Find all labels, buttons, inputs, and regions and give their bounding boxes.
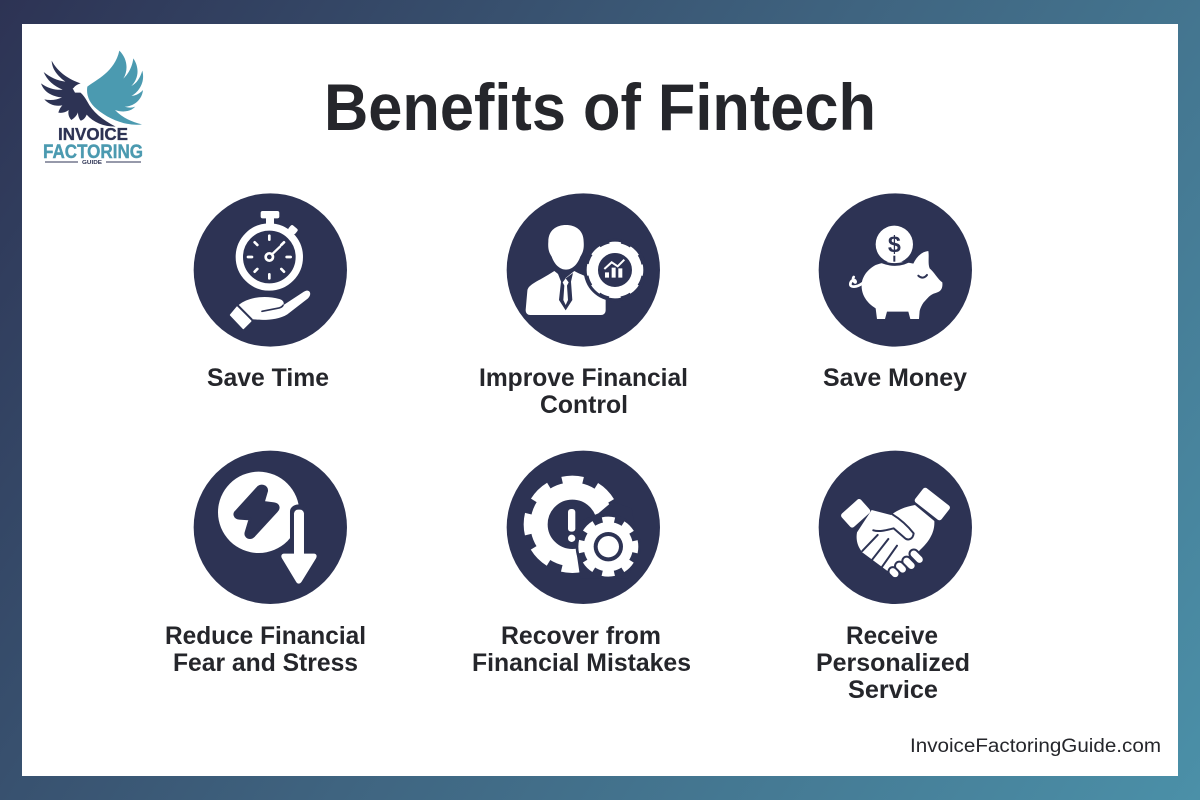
footer url: InvoiceFactoringGuide.com bbox=[910, 736, 1161, 757]
logo wordmark: factoring: FACTORING bbox=[43, 141, 143, 163]
icon badge: piggy bank bbox=[819, 193, 972, 347]
label line 2: Personalized bbox=[816, 649, 970, 677]
logo wordmark: guide: GUIDE bbox=[82, 160, 103, 166]
label line 1: Improve Financial bbox=[479, 364, 688, 392]
label line 2: Financial Mistakes bbox=[472, 649, 691, 677]
label: Save Money bbox=[823, 364, 967, 392]
icon badge: handshake bbox=[819, 451, 972, 604]
item: save time bbox=[194, 193, 347, 392]
logo rule left bbox=[45, 162, 78, 163]
logo rule right bbox=[106, 162, 141, 163]
label line 2: Fear and Stress bbox=[173, 649, 358, 677]
logo eagle bbox=[41, 51, 143, 127]
icon badge: piggy bank: $ bbox=[888, 232, 901, 258]
label: Save Time bbox=[207, 364, 329, 392]
label line 3: Service bbox=[848, 676, 938, 704]
logo bbox=[41, 51, 143, 166]
label line 2: Control bbox=[540, 391, 628, 419]
icon badge: businessman and gear bbox=[507, 193, 660, 347]
icon badge: stopwatch on hand bbox=[194, 193, 347, 347]
label line 1: Reduce Financial bbox=[165, 622, 366, 650]
item: reduce financial fear and stress bbox=[165, 451, 366, 677]
title: Benefits of Fintech bbox=[324, 70, 876, 144]
label line 1: Receive bbox=[846, 622, 938, 650]
logo wordmark: invoice: INVOICE bbox=[58, 124, 128, 144]
icon badge: energy down arrow bbox=[194, 451, 347, 604]
label line 1: Recover from bbox=[501, 622, 661, 650]
item: recover from financial mistakes bbox=[472, 451, 691, 677]
item: save money bbox=[819, 193, 972, 392]
item: improve financial control bbox=[479, 193, 688, 419]
icon badge: gears with warning bbox=[507, 451, 660, 604]
item: receive personalized service bbox=[816, 451, 972, 704]
